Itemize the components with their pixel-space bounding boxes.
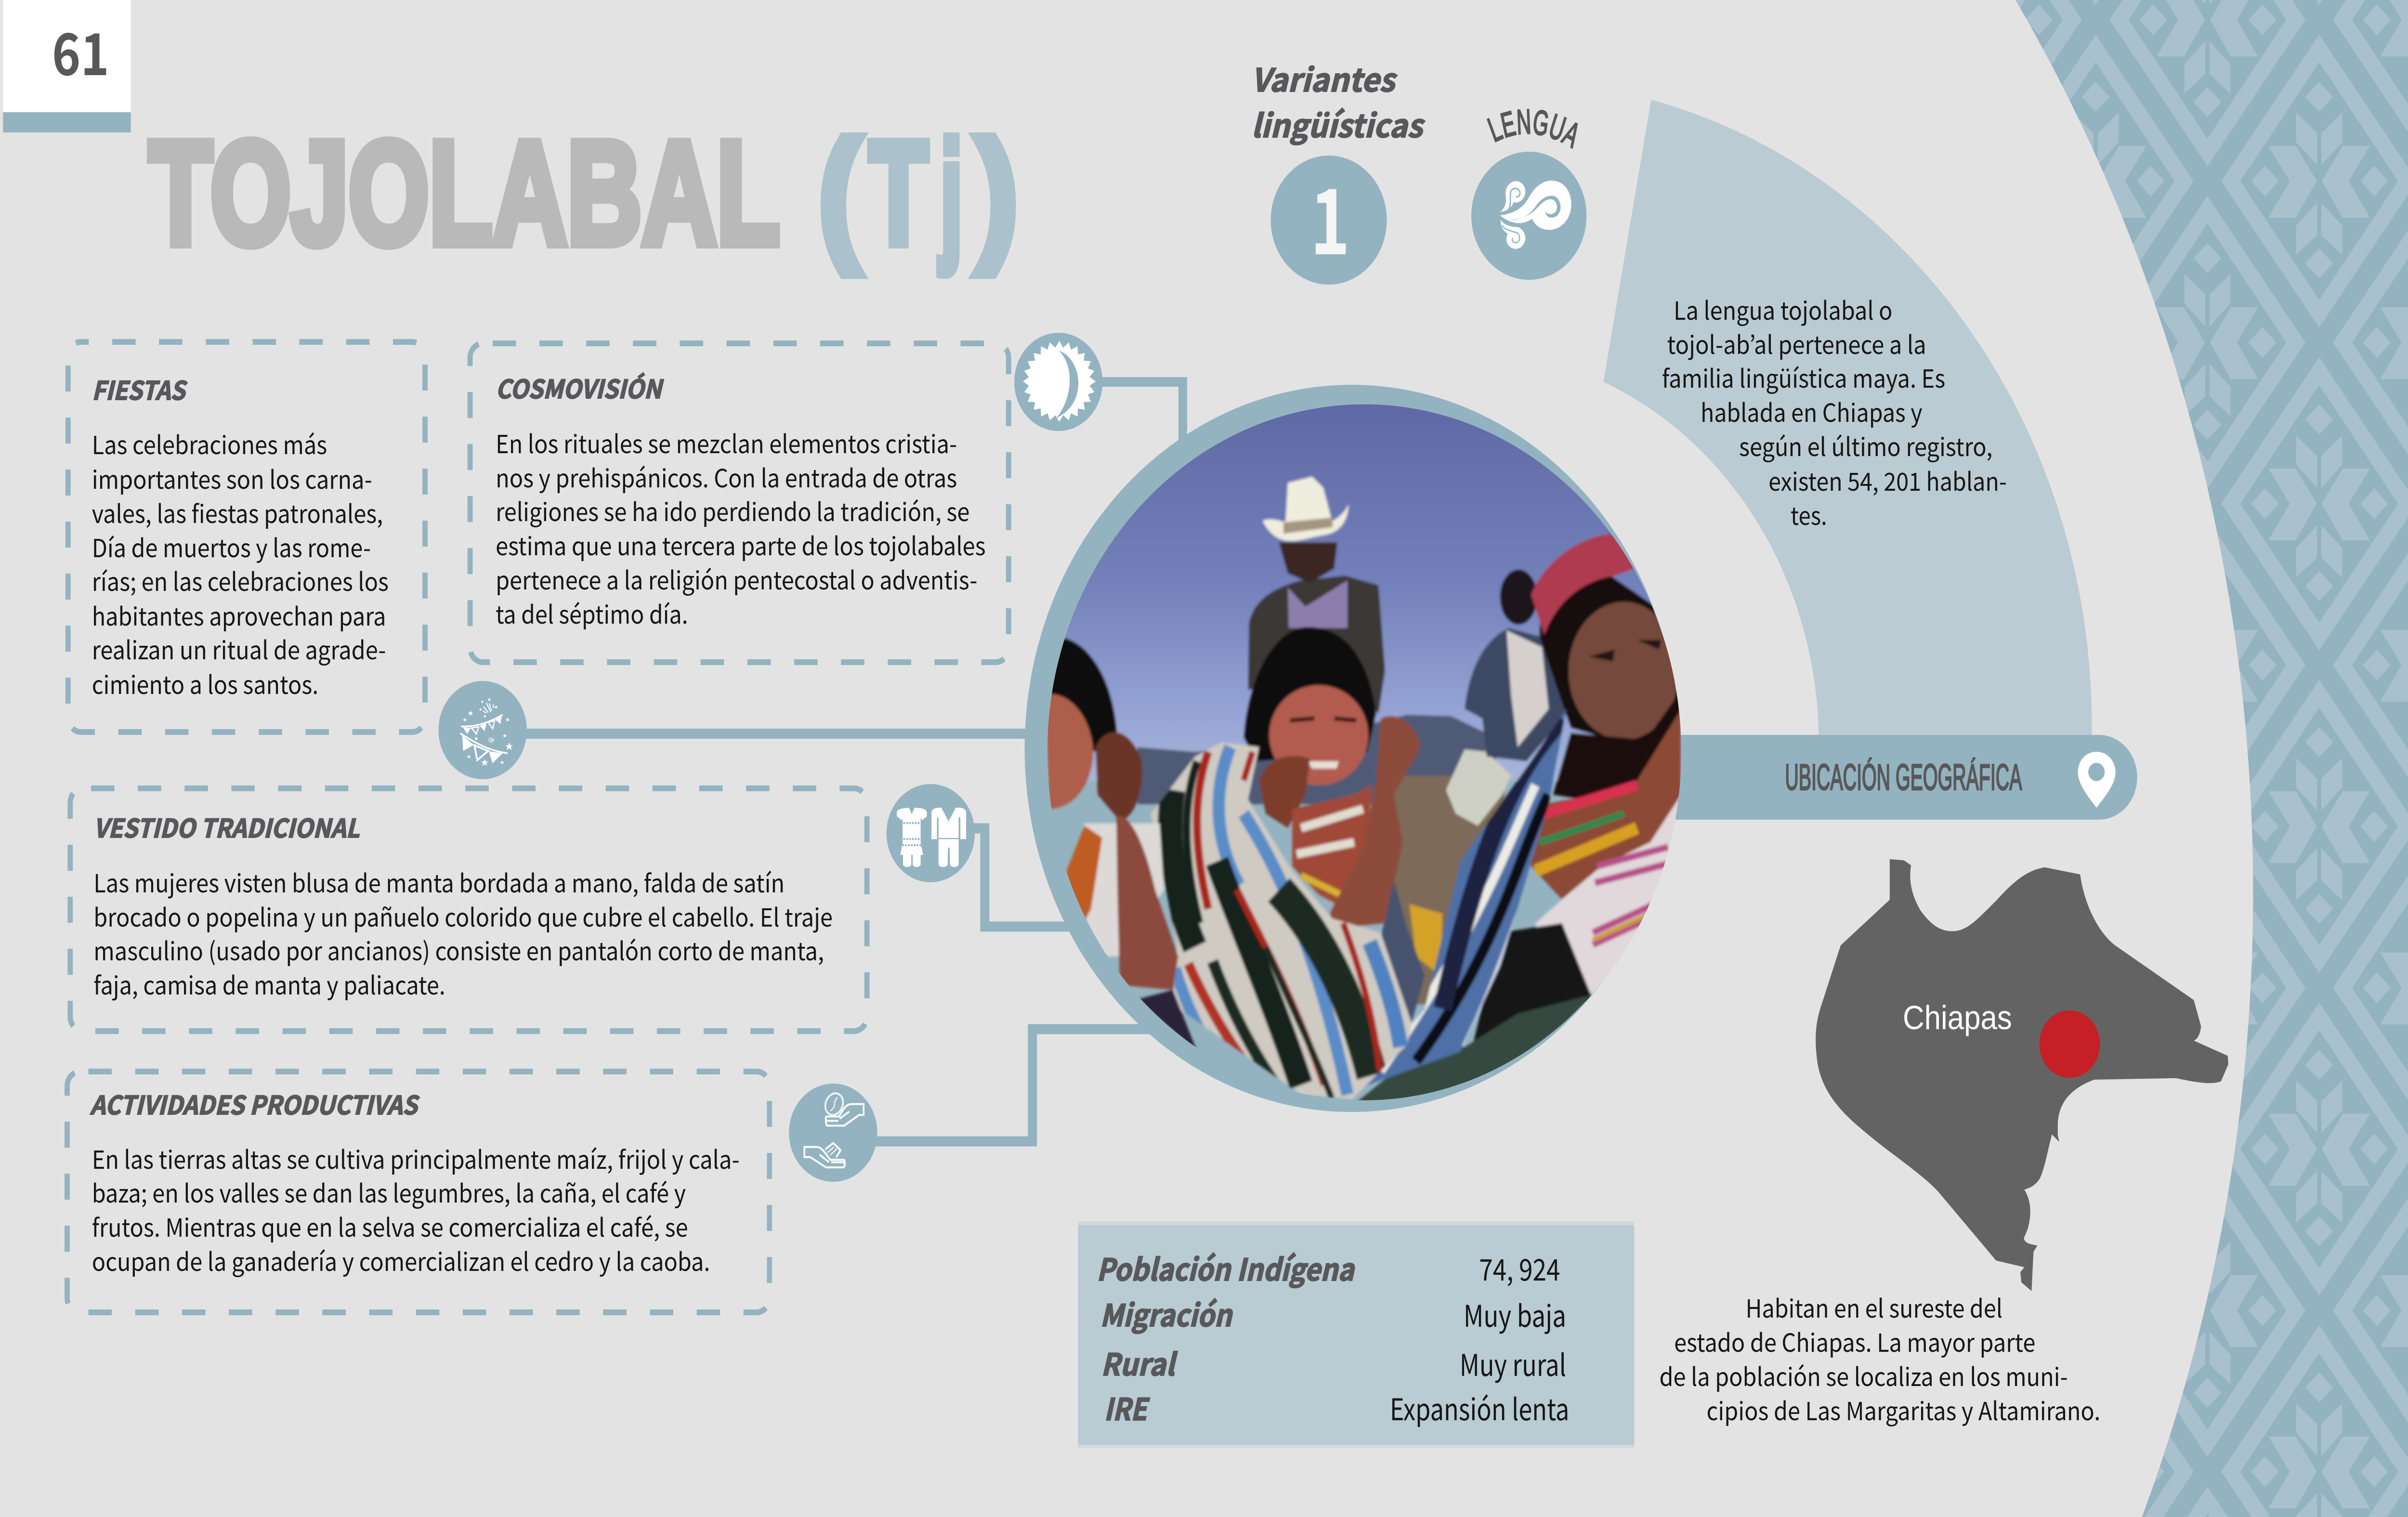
panel: actividades productivas bbox=[67, 1072, 770, 1312]
connector: vestido to photo bbox=[970, 828, 1092, 927]
vestido body text: brocado o popelina y un pañuelo colorido que cubre el cabello. El traje bbox=[93, 898, 833, 934]
title: ( bbox=[818, 111, 862, 276]
fiestas body text: rías; en las celebraciones los bbox=[92, 562, 389, 599]
language description text: existen 54, 201 hablan- bbox=[1768, 462, 2007, 498]
fiestas body text: cimiento a los santos. bbox=[92, 666, 318, 702]
fiestas heading: FIESTAS bbox=[92, 370, 187, 407]
actividades body text: baza; en los valles se dan las legumbres, la caña, el café y bbox=[92, 1174, 686, 1210]
table labels: IRE bbox=[1104, 1385, 1150, 1429]
Chiapas label: Chiapas bbox=[1903, 999, 2012, 1037]
left woman bbox=[1045, 638, 1197, 1052]
title: TOJOLABAL bbox=[149, 111, 780, 275]
photo: tojolabal people bbox=[1047, 405, 1681, 1100]
cosmovisión body text: religiones se ha ido perdiendo la tradición, se bbox=[496, 493, 969, 529]
connector: actividades to photo bbox=[871, 1029, 1161, 1141]
table values: Muy rural bbox=[1460, 1342, 1566, 1385]
textile pattern band bbox=[1950, 0, 2408, 1517]
icon: productive hands bbox=[789, 1084, 877, 1182]
man with hat bbox=[1248, 477, 1385, 714]
icon: sun and moon bbox=[1014, 333, 1102, 431]
vestido body text: faja, camisa de manta y paliacate. bbox=[93, 966, 445, 1002]
variantes lingüísticas heading: Variantes bbox=[1251, 55, 1398, 101]
central woman poncho bbox=[1142, 733, 1425, 1109]
fiestas body text: Día de muertos y las rome- bbox=[92, 529, 371, 565]
cosmovisión heading: COSMOVISIÓN bbox=[496, 369, 664, 406]
icon: traditional clothes bbox=[887, 784, 975, 882]
language description text: familia lingüística maya. Es bbox=[1662, 359, 1945, 395]
table values: Expansión lenta bbox=[1390, 1386, 1569, 1429]
location description text: de la población se localiza en los muni- bbox=[1659, 1358, 2068, 1394]
table values: Muy baja bbox=[1464, 1293, 1566, 1335]
icon: lengua speech swirl bbox=[1471, 152, 1586, 280]
lengua curved label: LENGUA bbox=[1487, 109, 1578, 149]
cosmovisión body text: En los rituales se mezclan elementos cristia- bbox=[496, 425, 957, 461]
table values: 74, 924 bbox=[1479, 1246, 1560, 1289]
location description text: cipios de Las Margaritas y Altamirano. bbox=[1707, 1392, 2100, 1428]
actividades body text: En las tierras altas se cultiva principalmente maíz, frijol y cala- bbox=[92, 1140, 740, 1177]
language description text: La lengua tojolabal o bbox=[1674, 291, 1892, 327]
table labels: Población Indígena bbox=[1097, 1245, 1356, 1290]
fiestas body text: realizan un ritual de agrade- bbox=[92, 631, 386, 667]
cosmovisión body text: nos y prehispánicos. Con la entrada de otras bbox=[496, 459, 957, 495]
language description text: tes. bbox=[1791, 497, 1827, 533]
photo ring bbox=[1025, 385, 1679, 1112]
language description text: hablada en Chiapas y bbox=[1701, 393, 1923, 430]
cosmovisión body text: estima que una tercera parte de los tojolabales bbox=[496, 527, 986, 563]
location title: UBICACIÓN GEOGRÁFICA bbox=[1785, 758, 2022, 798]
panel: vestido tradicional bbox=[70, 788, 867, 1031]
icon: map pin bbox=[2078, 752, 2116, 808]
cosmovisión body text: pertenece a la religión pentecostal o adventis- bbox=[496, 561, 978, 597]
variantes count badge: 1 bbox=[1310, 150, 1350, 281]
panel: fiestas bbox=[68, 342, 425, 732]
fiestas body text: Las celebraciones más bbox=[92, 426, 327, 462]
page number: 61 bbox=[52, 8, 109, 92]
fiestas body text: importantes son los carna- bbox=[92, 460, 372, 497]
location description text: Habitan en el sureste del bbox=[1746, 1289, 2002, 1325]
vestido body text: Las mujeres visten blusa de manta bordada a mano, falda de satín bbox=[93, 864, 785, 900]
panel: cosmovisión bbox=[470, 343, 1008, 662]
actividades body text: frutos. Mientras que en la selva se comercializa el café, se bbox=[92, 1208, 688, 1244]
title: T bbox=[869, 111, 928, 275]
title: ) bbox=[976, 111, 1018, 276]
actividades body text: ocupan de la ganadería y comercializan el cedro y la caoba. bbox=[92, 1242, 710, 1279]
table labels: Rural bbox=[1101, 1340, 1178, 1385]
page number tab bbox=[3, 0, 131, 132]
actividades heading: ACTIVIDADES PRODUCTIVAS bbox=[90, 1085, 420, 1122]
icon: party bunting bbox=[438, 681, 527, 779]
variantes lingüísticas heading: lingüísticas bbox=[1251, 101, 1425, 147]
variantes count badge bbox=[1271, 150, 1387, 285]
language description text: según el último registro, bbox=[1739, 428, 1992, 464]
central woman bbox=[1243, 627, 1425, 1023]
panel: language fan bbox=[1603, 100, 2092, 736]
fiestas body text: vales, las fiestas patronales, bbox=[92, 495, 383, 531]
table labels: Migración bbox=[1100, 1291, 1233, 1335]
connector: cosmovisión to photo bbox=[1096, 382, 1183, 448]
right woman bbox=[1354, 534, 1681, 1104]
title: j bbox=[939, 111, 963, 276]
location description text: estado de Chiapas. La mayor parte bbox=[1674, 1323, 2035, 1360]
connector: fiestas to photo bbox=[520, 729, 1040, 739]
right woman shawl bbox=[1345, 699, 1575, 1099]
panel: statistics table bbox=[1078, 1221, 1634, 1448]
boy in jacket bbox=[1465, 570, 1571, 761]
map of Chiapas bbox=[1816, 859, 2228, 1291]
location banner bbox=[1646, 735, 2137, 820]
location marker bbox=[2039, 1010, 2100, 1078]
fiestas body text: habitantes aprovechan para bbox=[92, 597, 386, 633]
language description text: tojol-ab’al pertenece a la bbox=[1667, 326, 1926, 362]
vestido body text: masculino (usado por ancianos) consiste en pantalón corto de manta, bbox=[93, 932, 824, 968]
lengua curved label bbox=[1487, 109, 1578, 149]
cosmovisión body text: ta del séptimo día. bbox=[496, 595, 688, 631]
vestido heading: VESTIDO TRADICIONAL bbox=[93, 808, 360, 845]
